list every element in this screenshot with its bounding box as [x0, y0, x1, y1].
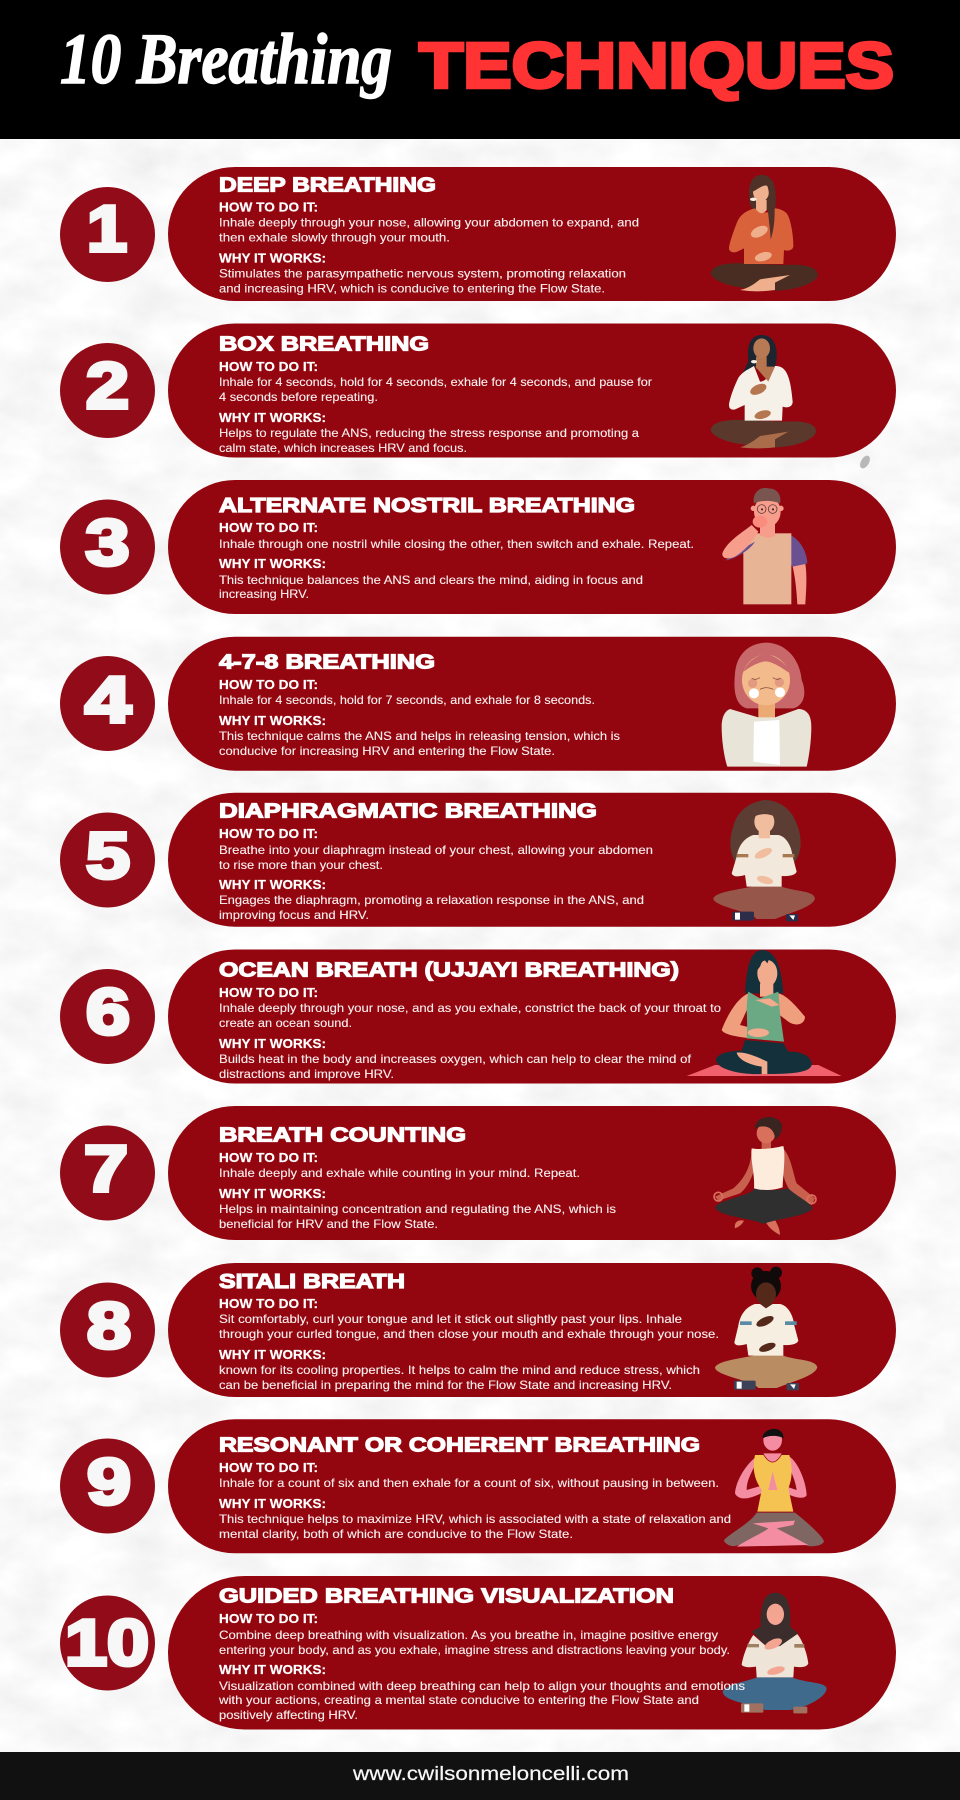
- panel: technique 2: [60, 324, 896, 458]
- technique text: 4 seconds before repeating.: [219, 390, 378, 404]
- pill background: [168, 1576, 896, 1730]
- pill background: [168, 1419, 896, 1553]
- technique text: [219, 1434, 731, 1541]
- technique text: HOW TO DO IT:: [219, 1150, 318, 1165]
- illustration: seated woman in orange sweater: [711, 175, 818, 291]
- technique text: Inhale for a count of six and then exhale for a count of six, without pausing in between.: [219, 1476, 719, 1490]
- technique text: Helps in maintaining concentration and regulating the ANS, which is: [219, 1202, 616, 1216]
- technique text: distractions and improve HRV.: [219, 1067, 394, 1081]
- technique text: HOW TO DO IT:: [219, 1296, 318, 1311]
- panel: technique 6: [60, 950, 896, 1084]
- technique text: [219, 174, 639, 296]
- technique text: can be beneficial in preparing the mind for the Flow State and increasing HRV.: [219, 1378, 672, 1392]
- technique text: WHY IT WORKS:: [219, 410, 326, 425]
- technique text: WHY IT WORKS:: [219, 1036, 326, 1051]
- technique text: ALTERNATE NOSTRIL BREATHING: [219, 494, 635, 517]
- number badge 2: [60, 343, 155, 438]
- technique text: to rise more than your chest.: [219, 858, 383, 872]
- illustration: seated woman in hijab: [723, 1593, 827, 1713]
- technique text: known for its cooling properties. It helps to calm the mind and reduce stress, which: [219, 1363, 700, 1377]
- technique text: This technique helps to maximize HRV, which is associated with a state of relaxation and: [219, 1512, 731, 1526]
- technique text: This technique calms the ANS and helps in releasing tension, which is: [219, 729, 620, 743]
- footer website: www.cwilsonmeloncelli.com: [352, 1764, 629, 1785]
- panel: technique 10: [60, 1576, 896, 1730]
- panel: technique 7: [60, 1106, 896, 1240]
- technique text: increasing HRV.: [219, 587, 309, 601]
- number badge 6: 6: [86, 975, 130, 1048]
- number badge 9: 9: [87, 1445, 131, 1518]
- technique text: WHY IT WORKS:: [219, 250, 326, 266]
- technique text: HOW TO DO IT:: [219, 200, 318, 214]
- illustration: seated woman with curly hair: [713, 800, 815, 921]
- technique text: positively affecting HRV.: [219, 1708, 358, 1722]
- illustration: seated woman in white sweater: [711, 335, 816, 448]
- technique text: Engages the diaphragm, promoting a relaxation response in the ANS, and: [219, 893, 644, 907]
- technique text: create an ocean sound.: [219, 1016, 352, 1030]
- technique text: [219, 651, 620, 758]
- footer band: [0, 1752, 960, 1800]
- number badge 10: 10: [65, 1606, 149, 1679]
- number badge 5: 5: [86, 819, 130, 892]
- technique text: OCEAN BREATH (UJJAYI BREATHING): [219, 959, 679, 982]
- technique text: Sit comfortably, curl your tongue and let it stick out slightly past your lips. Inhale: [219, 1312, 682, 1326]
- number badge 1: 1: [87, 192, 127, 265]
- technique text: Inhale through one nostril while closing the other, then switch and exhale. Repeat.: [219, 537, 694, 551]
- technique text: [219, 800, 653, 922]
- technique text: WHY IT WORKS:: [219, 877, 326, 892]
- panel: technique 4: [60, 637, 896, 771]
- technique text: through your curled tongue, and then close your mouth and exhale through your nose.: [219, 1327, 719, 1341]
- number badge 4: [60, 656, 155, 751]
- technique text: GUIDED BREATHING VISUALIZATION: [219, 1585, 674, 1608]
- technique text: WHY IT WORKS:: [219, 1496, 326, 1511]
- technique text: This technique balances the ANS and clears the mind, aiding in focus and: [219, 573, 643, 587]
- pill background: [168, 324, 896, 458]
- technique text: HOW TO DO IT:: [219, 677, 318, 692]
- number badge 9: [60, 1438, 155, 1534]
- technique text: Helps to regulate the ANS, reducing the stress response and promoting a: [219, 426, 639, 440]
- pill background: [168, 1106, 896, 1240]
- panel: technique 8: [60, 1263, 896, 1397]
- technique text: RESONANT OR COHERENT BREATHING: [219, 1434, 700, 1457]
- illustration: seated woman with hair buns: [715, 1267, 817, 1390]
- technique text: then exhale slowly through your mouth.: [219, 230, 450, 244]
- technique text: WHY IT WORKS:: [219, 1662, 326, 1677]
- technique text: [219, 332, 652, 455]
- technique text: Builds heat in the body and increases oxygen, which can help to clear the mind of: [219, 1052, 692, 1066]
- illustration: man closing one nostril: [722, 488, 807, 604]
- panel: technique 3: [60, 480, 896, 614]
- pill background: [168, 480, 896, 614]
- illustration: woman on mat: [687, 950, 842, 1076]
- illustration: woman in yoga prayer pose: [724, 1429, 824, 1547]
- number badge 2: 2: [86, 349, 129, 422]
- number badge 5: [60, 812, 155, 908]
- pill background: [168, 1263, 896, 1397]
- technique text: DIAPHRAGMATIC BREATHING: [219, 800, 597, 823]
- illustration: woman exhaling: [722, 643, 811, 767]
- technique text: HOW TO DO IT:: [219, 1460, 318, 1475]
- technique text: HOW TO DO IT:: [219, 985, 318, 1000]
- technique text: WHY IT WORKS:: [219, 713, 326, 728]
- technique text: beneficial for HRV and the Flow State.: [219, 1217, 438, 1231]
- technique text: HOW TO DO IT:: [219, 520, 318, 535]
- technique text: Stimulates the parasympathetic nervous system, promoting relaxation: [219, 266, 626, 280]
- technique text: [219, 1270, 719, 1392]
- technique text: mental clarity, both of which are conducive to the Flow State.: [219, 1527, 573, 1541]
- number badge 4: 4: [85, 663, 131, 736]
- illustration: meditating woman in lotus pose: [714, 1117, 816, 1235]
- pill background: [168, 950, 896, 1084]
- technique text: improving focus and HRV.: [219, 908, 369, 922]
- pill background: [168, 793, 896, 927]
- number badge 7: [60, 1126, 155, 1220]
- technique text: Inhale for 4 seconds, hold for 4 seconds, exhale for 4 seconds, and pause for: [219, 375, 652, 389]
- pill background: [168, 637, 896, 771]
- number badge 8: 8: [87, 1289, 131, 1362]
- header band: [0, 0, 960, 139]
- technique text: and increasing HRV, which is conducive to entering the Flow State.: [219, 282, 605, 296]
- technique text: BOX BREATHING: [219, 332, 429, 356]
- technique text: HOW TO DO IT:: [219, 826, 318, 841]
- technique text: Inhale deeply through your nose, and as you exhale, constrict the back of your throat to: [219, 1001, 721, 1015]
- technique text: Breathe into your diaphragm instead of your chest, allowing your abdomen: [219, 843, 653, 857]
- technique text: WHY IT WORKS:: [219, 1347, 326, 1362]
- technique text: conducive for increasing HRV and entering the Flow State.: [219, 744, 555, 758]
- technique text: SITALI BREATH: [219, 1270, 405, 1293]
- number badge 3: 3: [86, 506, 130, 579]
- technique text: [218, 1585, 745, 1722]
- technique text: Visualization combined with deep breathing can help to align your thoughts and emotions: [219, 1679, 745, 1693]
- technique text: WHY IT WORKS:: [219, 556, 326, 571]
- panel: technique 5: [60, 793, 896, 927]
- technique text: calm state, which increases HRV and focus.: [219, 441, 467, 455]
- number badge 8: [60, 1282, 155, 1378]
- number badge 1: [60, 187, 155, 282]
- title: 10 Breathing: 10 Breathing: [60, 19, 392, 99]
- technique text: entering your body, and as you exhale, imagine stress and distractions leaving your body.: [219, 1643, 730, 1657]
- technique text: DEEP BREATHING: [219, 174, 436, 196]
- pill background: [168, 167, 896, 301]
- technique text: [219, 959, 721, 1081]
- technique text: [219, 1124, 616, 1231]
- number badge 3: [60, 500, 155, 594]
- technique text: 4-7-8 BREATHING: [219, 651, 435, 674]
- number badge 6: [60, 969, 155, 1064]
- technique text: BREATH COUNTING: [219, 1124, 466, 1147]
- technique text: with your actions, creating a mental state conducive to entering the Flow State and: [218, 1693, 699, 1707]
- technique text: Inhale deeply and exhale while counting in your mind. Repeat.: [219, 1166, 580, 1180]
- technique text: Combine deep breathing with visualization. As you breathe in, imagine positive energy: [219, 1628, 718, 1642]
- number badge 10: [60, 1596, 155, 1690]
- panel: technique 9: [60, 1419, 896, 1553]
- technique text: HOW TO DO IT:: [219, 359, 318, 374]
- technique text: HOW TO DO IT:: [219, 1611, 318, 1626]
- technique text: Inhale deeply through your nose, allowing your abdomen to expand, and: [219, 216, 639, 230]
- technique text: WHY IT WORKS:: [219, 1186, 326, 1201]
- panel: technique 1: [60, 167, 896, 301]
- number badge 7: 7: [84, 1132, 128, 1205]
- technique text: Inhale for 4 seconds, hold for 7 seconds, and exhale for 8 seconds.: [219, 693, 595, 707]
- title: TECHNIQUES: TECHNIQUES: [419, 30, 894, 102]
- technique text: [219, 494, 694, 601]
